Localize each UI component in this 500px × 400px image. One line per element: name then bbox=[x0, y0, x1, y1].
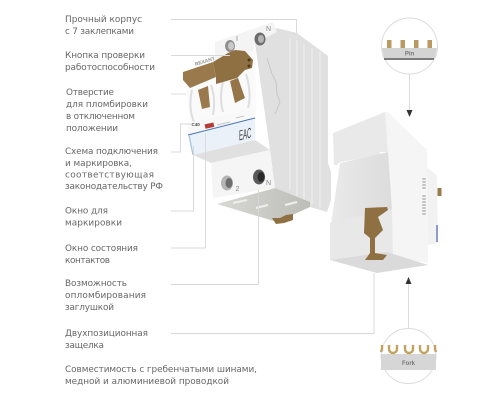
label text C40: C40 bbox=[192, 122, 200, 127]
caption: marking window bbox=[65, 206, 122, 228]
caption: sealing cap: Возможность bbox=[65, 279, 127, 289]
rear device: breaker back view bbox=[330, 112, 442, 273]
caption: latch bbox=[65, 329, 148, 351]
fork comb bar inset bbox=[381, 328, 436, 384]
caption: contact window bbox=[65, 244, 138, 266]
caption: test button: Кнопка проверки bbox=[65, 51, 145, 61]
label plate bbox=[188, 108, 255, 135]
upper terminal plate bbox=[215, 22, 277, 75]
brown clip bbox=[364, 207, 388, 260]
lower terminal shadow bbox=[193, 140, 270, 163]
module front with toggles bbox=[186, 50, 256, 122]
side of housing bbox=[255, 28, 331, 212]
EAC mark: EAC bbox=[239, 126, 251, 144]
caption: test button: работоспособности bbox=[65, 63, 155, 73]
terminal labels: N bbox=[266, 26, 271, 33]
upper rail bbox=[333, 112, 388, 165]
front device: circuit breaker bbox=[183, 22, 331, 224]
upper terminal screw holes bbox=[225, 32, 266, 52]
gold forks bbox=[381, 345, 436, 353]
caption: compatibility: медной и алюминиевой проводкой bbox=[65, 377, 229, 387]
terminal labels bbox=[236, 26, 271, 193]
caption: housing: с 7 заклепками bbox=[65, 27, 134, 37]
caption: latch: защелка bbox=[65, 341, 104, 351]
caption: marking window: маркировки bbox=[65, 218, 122, 228]
caption: wiring diagram: соответствующая bbox=[65, 170, 154, 180]
device edge with label bbox=[427, 168, 438, 245]
terminal labels: N bbox=[266, 180, 271, 187]
caption: wiring diagram: законодательству РФ bbox=[65, 182, 163, 192]
caption: test button bbox=[65, 51, 155, 73]
caption: wiring diagram: Схема подключения bbox=[65, 147, 158, 157]
caption: sealing hole bbox=[66, 88, 148, 134]
right face of housing bbox=[385, 112, 428, 263]
arrow: fork bar to device bbox=[406, 277, 412, 284]
brand on toggle: REXANT bbox=[194, 56, 216, 68]
red contact status window bbox=[205, 123, 214, 129]
terminal labels: I bbox=[236, 36, 238, 43]
lower block bbox=[330, 209, 393, 260]
fork label: Fork bbox=[402, 361, 416, 367]
brown latch at base bbox=[272, 214, 293, 224]
caption: compatibility: Совместимость с гребенчатыми шинами, bbox=[65, 365, 257, 375]
small brown detail bbox=[438, 188, 442, 196]
feature captions bbox=[65, 15, 257, 387]
pin bar bbox=[382, 48, 437, 58]
caption: sealing hole: Отверстие bbox=[66, 88, 114, 98]
bottom of housing bbox=[217, 188, 310, 222]
caption: housing: Прочный корпус bbox=[65, 15, 142, 25]
caption: sealing hole: положении bbox=[66, 124, 118, 134]
pin comb bar inset bbox=[382, 18, 438, 74]
caption: latch: Двухпозиционная bbox=[65, 329, 148, 339]
lower terminal screw holes bbox=[221, 170, 265, 190]
gold pins bbox=[387, 40, 432, 48]
caption: marking window: Окно для bbox=[65, 206, 108, 216]
inset circle bbox=[381, 328, 436, 384]
caption: housing bbox=[65, 15, 142, 37]
caption: wiring diagram bbox=[65, 147, 163, 192]
caption: sealing hole: для пломбировки bbox=[66, 100, 148, 110]
blue marking panel bbox=[188, 118, 255, 155]
caption: sealing cap bbox=[65, 279, 146, 313]
caption: sealing cap: опломбирования bbox=[65, 291, 146, 301]
brown toggle handles bbox=[183, 50, 253, 109]
lower terminal block bbox=[211, 150, 275, 198]
arrow: pin bar to device bbox=[406, 110, 412, 117]
caption: sealing hole: в отключенном bbox=[66, 112, 135, 122]
inset circle bbox=[382, 18, 438, 74]
caption: contact window: контактов bbox=[65, 256, 110, 266]
fork bar bbox=[381, 354, 436, 370]
pin label: Pin bbox=[405, 52, 414, 58]
caption: sealing cap: заглушкой bbox=[65, 303, 114, 313]
caption: contact window: Окно состояния bbox=[65, 244, 138, 254]
caption: compatibility bbox=[65, 365, 257, 387]
caption: wiring diagram: и маркировка, bbox=[65, 159, 132, 169]
leader lines bbox=[171, 20, 410, 334]
terminal labels: 2 bbox=[236, 186, 240, 193]
base of housing bbox=[330, 252, 428, 273]
middle rail channel bbox=[331, 152, 392, 224]
